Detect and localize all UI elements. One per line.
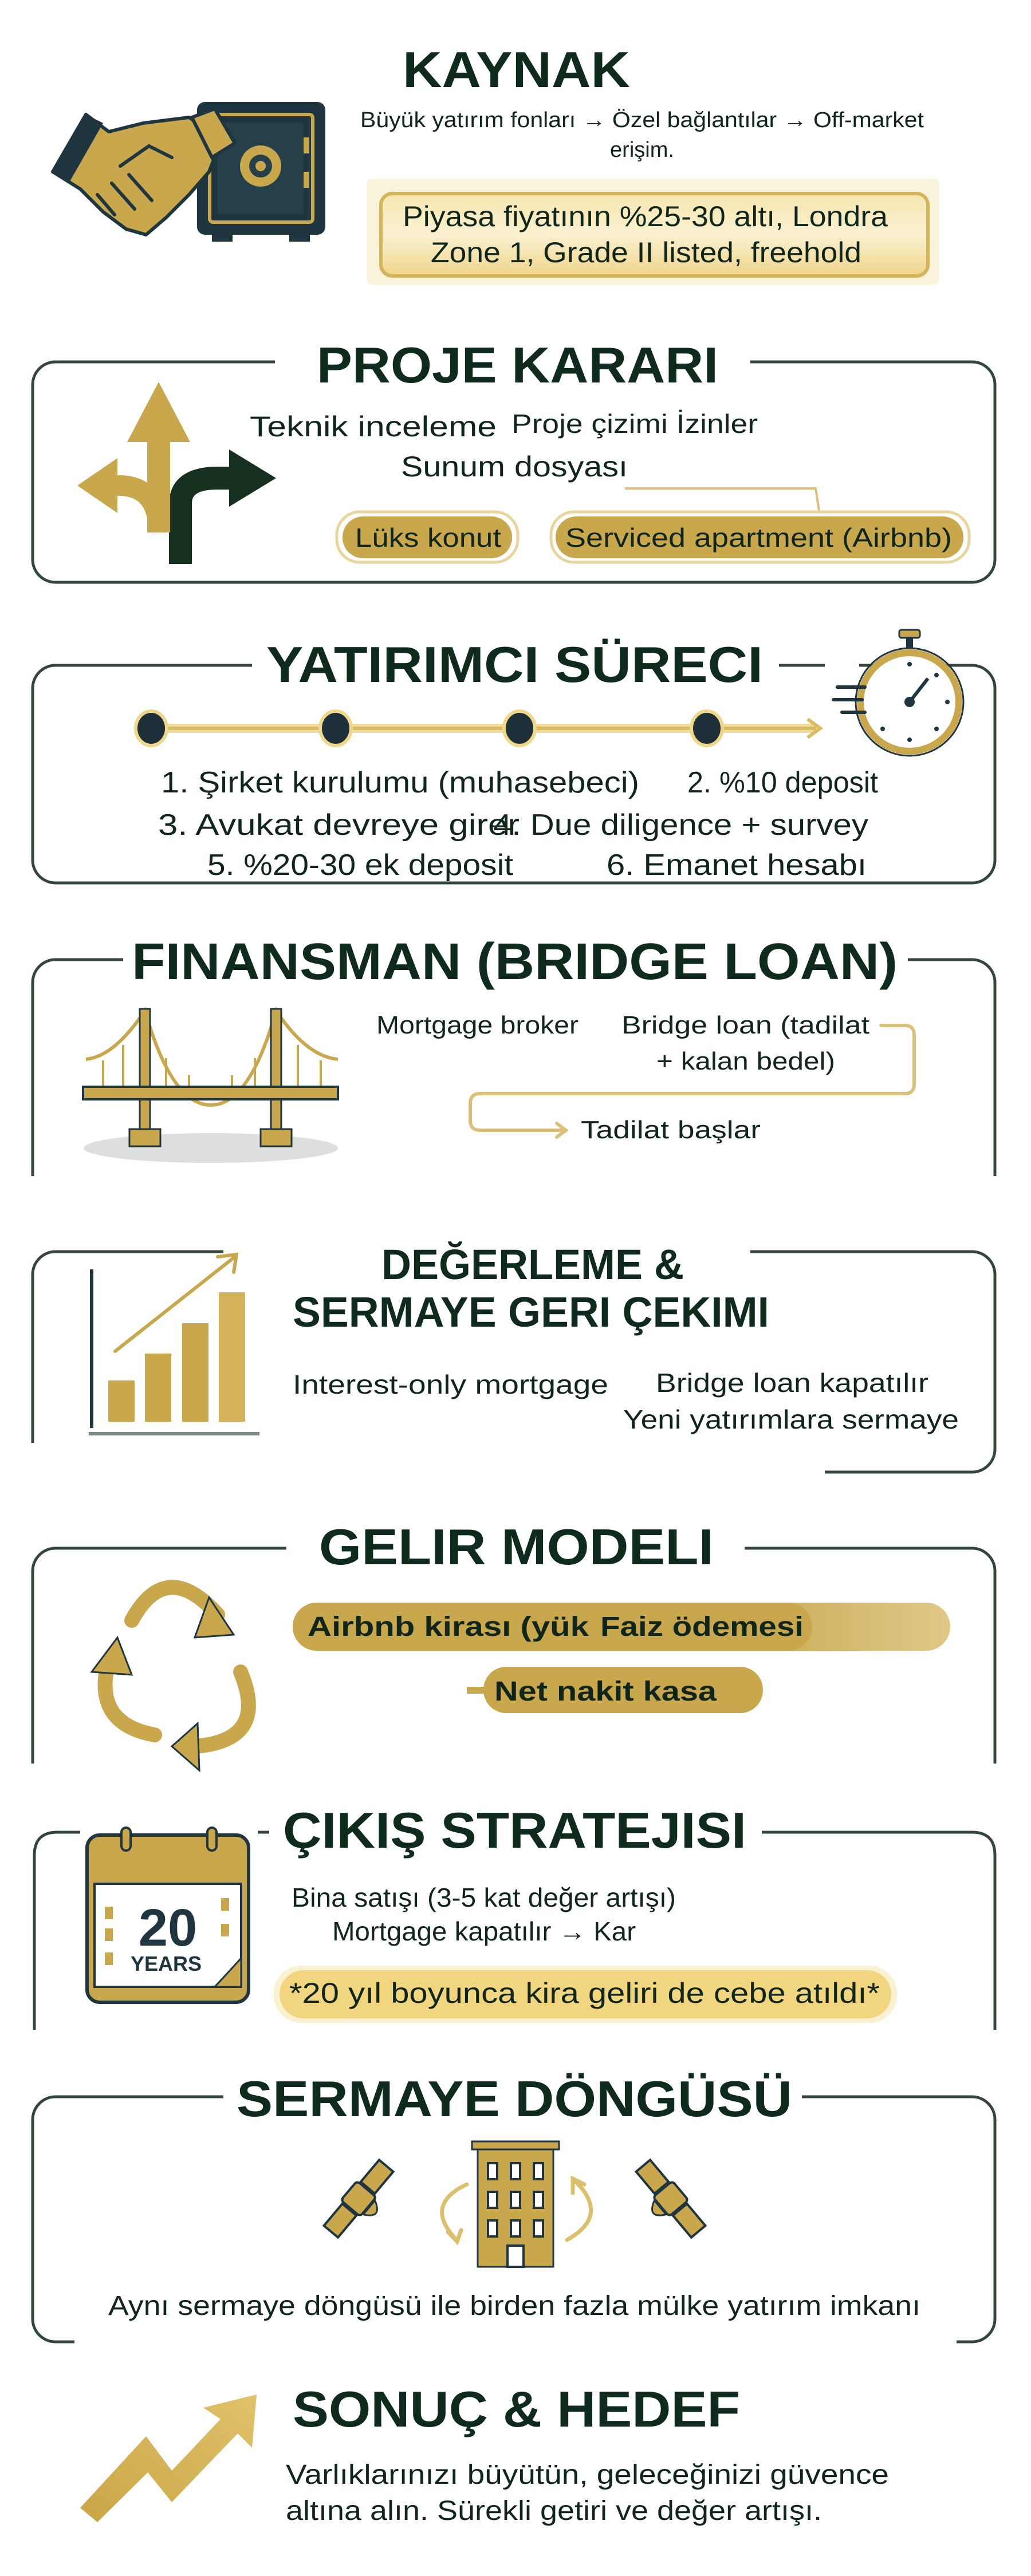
text: exit steps: Bina satışı (3-5 kat değer artışı) <box>292 1883 676 1912</box>
icon: satellite left <box>321 2157 403 2246</box>
panel: kaynak <box>53 41 939 285</box>
text: project steps: Teknik inceleme <box>250 411 497 443</box>
text: project steps <box>250 409 758 483</box>
pill: income bar: Airbnb kirası (yük <box>308 1612 589 1642</box>
icon: calendar 20 years: 20 <box>139 1899 197 1957</box>
icon: building with cycle <box>442 2141 591 2267</box>
icon: growth chart <box>89 1255 259 1434</box>
panel: proje karari <box>33 337 995 582</box>
icon: stopwatch <box>825 630 963 756</box>
title: DEGERLEME <box>293 1241 769 1336</box>
timeline <box>136 711 820 745</box>
icon: direction arrows <box>77 382 276 564</box>
title: FINANSMAN: FINANSMAN (BRIDGE LOAN) <box>132 933 898 991</box>
text: project steps: Sunum dosyası <box>401 451 628 483</box>
text: financing steps: Bridge loan (tadilat <box>621 1011 869 1039</box>
panel: yatirimci sureci <box>33 630 995 883</box>
text: source subtitle: Büyük yatırım fonları → Özel bağlantılar → Off-market <box>360 108 924 132</box>
panel: finansman <box>0 933 1031 1210</box>
text: investor steps: 6. Emanet hesabı <box>607 849 867 882</box>
text: financing steps <box>376 1011 869 1144</box>
callout: price box: Zone 1, Grade II listed, freehold <box>431 236 861 269</box>
text: project steps: Proje çizimi İzinler <box>511 409 758 439</box>
callout: rental income pill: *20 yıl boyunca kira geliri de cebe atıldı* <box>289 1977 880 2009</box>
text: financing steps: + kalan bedel) <box>656 1047 835 1075</box>
icon: rising arrow <box>80 2394 257 2522</box>
title: PROJE KARARI: PROJE KARARI <box>317 337 718 393</box>
text: investor steps: 2. %10 deposit <box>687 766 879 799</box>
icon: satellite right <box>626 2157 708 2246</box>
panel: sonuc hedef <box>80 2381 889 2526</box>
text: financing steps: Tadilat başlar <box>581 1116 761 1144</box>
pill: Serviced apartment: Serviced apartment (Airbnb) <box>565 523 952 553</box>
pill: Lüks konut <box>337 512 518 562</box>
panel: sermaye dongusu <box>33 2070 995 2353</box>
title: CIKIS STRATEJISI: ÇIKIŞ STRATEJISI <box>283 1802 746 1859</box>
text: valuation steps <box>293 1368 959 1434</box>
text: source subtitle: erişim. <box>610 138 674 162</box>
text: investor steps <box>158 766 879 882</box>
icon: handshake and safe <box>53 102 325 242</box>
text: investor steps: 1. Şirket kurulumu (muhasebeci) <box>161 766 639 799</box>
icon: recycle arrows <box>92 1587 249 1770</box>
panel: cikis stratejisi <box>34 1802 995 2030</box>
pill: Lüks konut: Lüks konut <box>355 523 501 553</box>
arrow: financing flow <box>470 1025 914 1137</box>
callout: price box: Piyasa fiyatının %25-30 altı, Londra <box>403 200 888 232</box>
callout: price box <box>367 179 939 285</box>
text: investor steps: 4. Due diligence + survey <box>493 808 868 842</box>
text: exit steps: Mortgage kapatılır → Kar <box>332 1916 636 1946</box>
icon: calendar 20 years <box>80 1825 258 2002</box>
title: SONUC HEDEF: SONUÇ & HEDEF <box>293 2381 740 2437</box>
text: conclusion: altına alın. Sürekli getiri ve değer artışı. <box>286 2496 822 2526</box>
icon: calendar 20 years: YEARS <box>131 1952 202 1975</box>
text: exit steps <box>292 1883 676 1946</box>
text: valuation steps: Yeni yatırımlara sermaye <box>623 1405 959 1434</box>
title: GELIR MODELI: GELIR MODELI <box>319 1518 714 1575</box>
text: capital cycle: Aynı sermaye döngüsü ile birden fazla mülke yatırım imkanı <box>108 2291 920 2321</box>
text: conclusion <box>286 2460 889 2526</box>
title: DEGERLEME: SERMAYE GERI ÇEKIMI <box>293 1288 769 1336</box>
text: investor steps: 5. %20-30 ek deposit <box>207 849 514 882</box>
title: YATIRIMCI SÜRECI: YATIRIMCI SÜRECI <box>266 636 763 693</box>
pill: Serviced apartment <box>551 512 969 562</box>
pill: net cash <box>467 1667 763 1713</box>
pill: income bar: Faiz ödemesi <box>600 1612 804 1642</box>
title: KAYNAK: KAYNAK <box>403 41 630 98</box>
panel: gelir modeli <box>0 1518 1031 1809</box>
pill: net cash: Net nakit kasa <box>494 1676 717 1707</box>
panel: degerleme <box>23 1237 995 1477</box>
text: source subtitle <box>360 108 924 162</box>
text: valuation steps: Bridge loan kapatılır <box>656 1368 928 1398</box>
text: financing steps: Mortgage broker <box>376 1011 579 1039</box>
callout: rental income pill <box>274 1966 897 2023</box>
pill: income bar <box>293 1603 950 1651</box>
connector <box>625 488 819 511</box>
text: investor steps: 3. Avukat devreye girer <box>158 808 520 842</box>
title: DEGERLEME: DEĞERLEME & <box>381 1241 684 1288</box>
text: valuation steps: Interest-only mortgage <box>293 1370 608 1399</box>
title: SERMAYE DONGUSU: SERMAYE DÖNGÜSÜ <box>237 2070 792 2127</box>
text: conclusion: Varlıklarınızı büyütün, geleceğinizi güvence <box>286 2460 889 2490</box>
icon: bridge <box>83 1009 338 1163</box>
